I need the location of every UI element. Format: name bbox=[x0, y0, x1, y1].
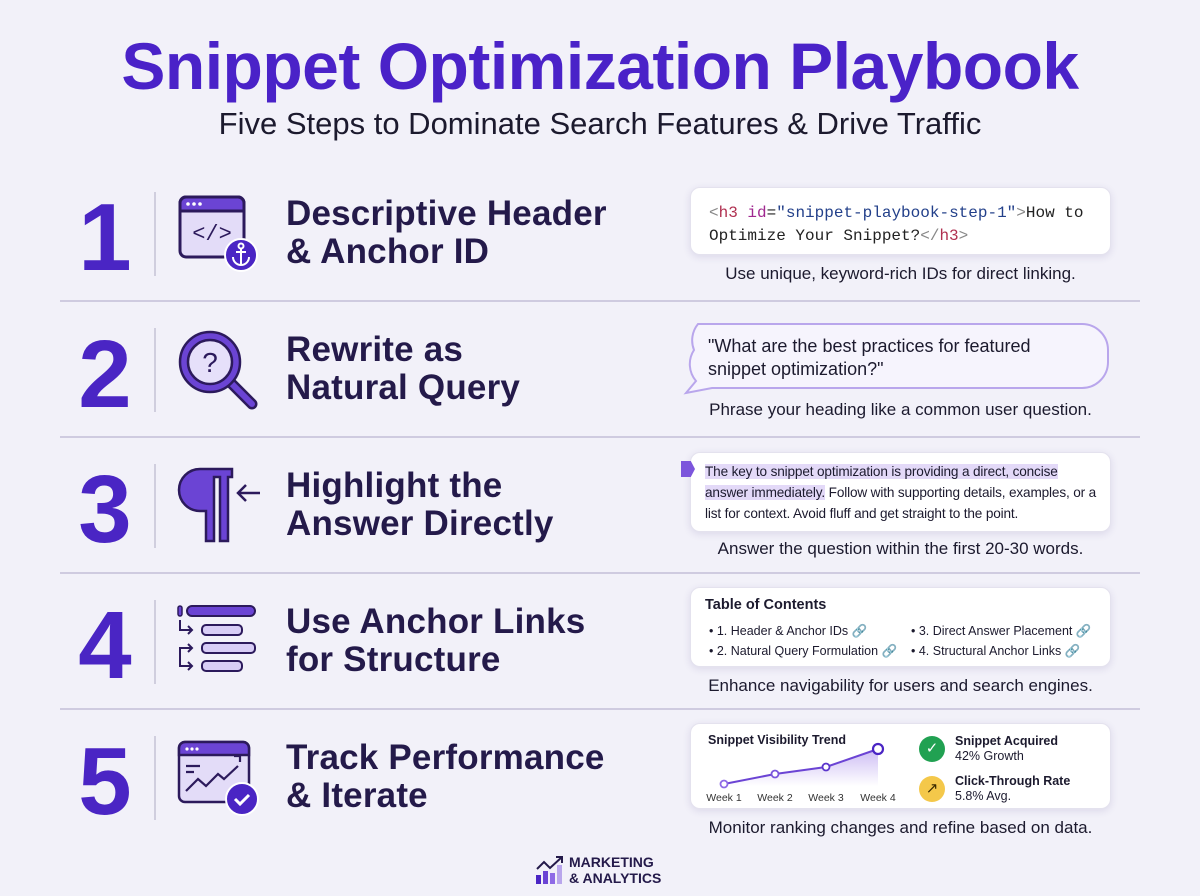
heading 4: Use Anchor Links bbox=[286, 602, 585, 641]
line chart: Week 2 bbox=[757, 792, 793, 804]
performance card: Snippet Visibility Trend bbox=[708, 733, 846, 747]
title: Snippet Optimization Playbook bbox=[121, 29, 1079, 103]
heading 2 bbox=[286, 330, 520, 407]
stat: snippet acquired: 42% Growth bbox=[955, 749, 1024, 763]
icon: pilcrow bbox=[178, 468, 260, 542]
performance card bbox=[690, 723, 1111, 809]
heading 2: Natural Query bbox=[286, 368, 520, 407]
heading 4 bbox=[286, 602, 585, 679]
caption 3: Answer the question within the first 20-30 words. bbox=[718, 539, 1083, 558]
heading 1: Descriptive Header bbox=[286, 194, 607, 233]
heading 5: Track Performance bbox=[286, 738, 605, 777]
heading 4: for Structure bbox=[286, 640, 501, 679]
heading 3: Answer Directly bbox=[286, 504, 554, 543]
stat: snippet acquired bbox=[919, 734, 1058, 763]
number 2: 2 bbox=[78, 321, 132, 428]
code card bbox=[690, 187, 1111, 255]
heading 5 bbox=[286, 738, 605, 815]
heading 1: & Anchor ID bbox=[286, 232, 489, 271]
footer logo: MARKETING bbox=[569, 854, 654, 870]
number 3: 3 bbox=[78, 456, 132, 563]
TOC card: • 1. Header & Anchor IDs 🔗 bbox=[709, 624, 867, 638]
answer card: The key to snippet optimization is providing a direct, concise answer immediately. Follow with supporting details, examples, or a list for context. Avoid fluff and get straight to the point. bbox=[705, 464, 1096, 521]
heading 3: Highlight the bbox=[286, 466, 502, 505]
icon: magnifier question: ? bbox=[202, 347, 218, 378]
icon: chart window with check bbox=[178, 740, 259, 816]
subtitle: Five Steps to Dominate Search Features & Drive Traffic bbox=[219, 106, 981, 141]
line chart: Week 4 bbox=[860, 792, 896, 804]
TOC card bbox=[690, 587, 1111, 667]
heading 3 bbox=[286, 466, 554, 543]
footer logo bbox=[536, 854, 661, 886]
number 4: 4 bbox=[78, 592, 132, 699]
line chart bbox=[706, 742, 896, 804]
number 5: 5 bbox=[78, 728, 132, 835]
answer card bbox=[690, 452, 1111, 532]
stat: CTR: ↗ bbox=[926, 780, 938, 797]
line chart: Week 1 bbox=[706, 792, 742, 804]
separators bbox=[60, 300, 1140, 302]
icon: magnifier question bbox=[178, 330, 258, 410]
icon: anchor links list bbox=[177, 605, 256, 672]
caption 2: Phrase your heading like a common user question. bbox=[709, 400, 1092, 419]
stat: CTR: 5.8% Avg. bbox=[955, 789, 1011, 803]
heading 2: Rewrite as bbox=[286, 330, 463, 369]
caption 4: Enhance navigability for users and search engines. bbox=[708, 676, 1093, 695]
heading 5: & Iterate bbox=[286, 776, 428, 815]
caption 5: Monitor ranking changes and refine based on data. bbox=[709, 818, 1092, 837]
code card: <h3 id="snippet-playbook-step-1">How to Optimize Your Snippet?</h3> bbox=[709, 204, 1084, 245]
caption 1: Use unique, keyword-rich IDs for direct linking. bbox=[725, 264, 1076, 283]
TOC card: • 3. Direct Answer Placement 🔗 bbox=[911, 624, 1091, 638]
footer logo: & ANALYTICS bbox=[569, 870, 661, 886]
icon: code window with anchor bbox=[178, 196, 258, 272]
speech bubble: "What are the best practices for featured bbox=[708, 336, 1031, 356]
heading 1 bbox=[286, 194, 607, 271]
icon: code window with anchor: </> bbox=[192, 222, 232, 247]
stat: CTR: Click-Through Rate bbox=[955, 774, 1070, 788]
TOC card: • 4. Structural Anchor Links 🔗 bbox=[911, 644, 1080, 658]
line chart: Week 3 bbox=[808, 792, 844, 804]
stat: snippet acquired: ✓ bbox=[926, 740, 938, 757]
number 1: 1 bbox=[78, 184, 132, 291]
stat: snippet acquired: Snippet Acquired bbox=[955, 734, 1058, 748]
stat: CTR bbox=[919, 774, 1070, 803]
speech bubble: snippet optimization?" bbox=[708, 359, 884, 379]
TOC card: Table of Contents bbox=[705, 597, 826, 613]
TOC card: • 2. Natural Query Formulation 🔗 bbox=[709, 644, 897, 658]
speech bubble bbox=[684, 323, 1109, 394]
